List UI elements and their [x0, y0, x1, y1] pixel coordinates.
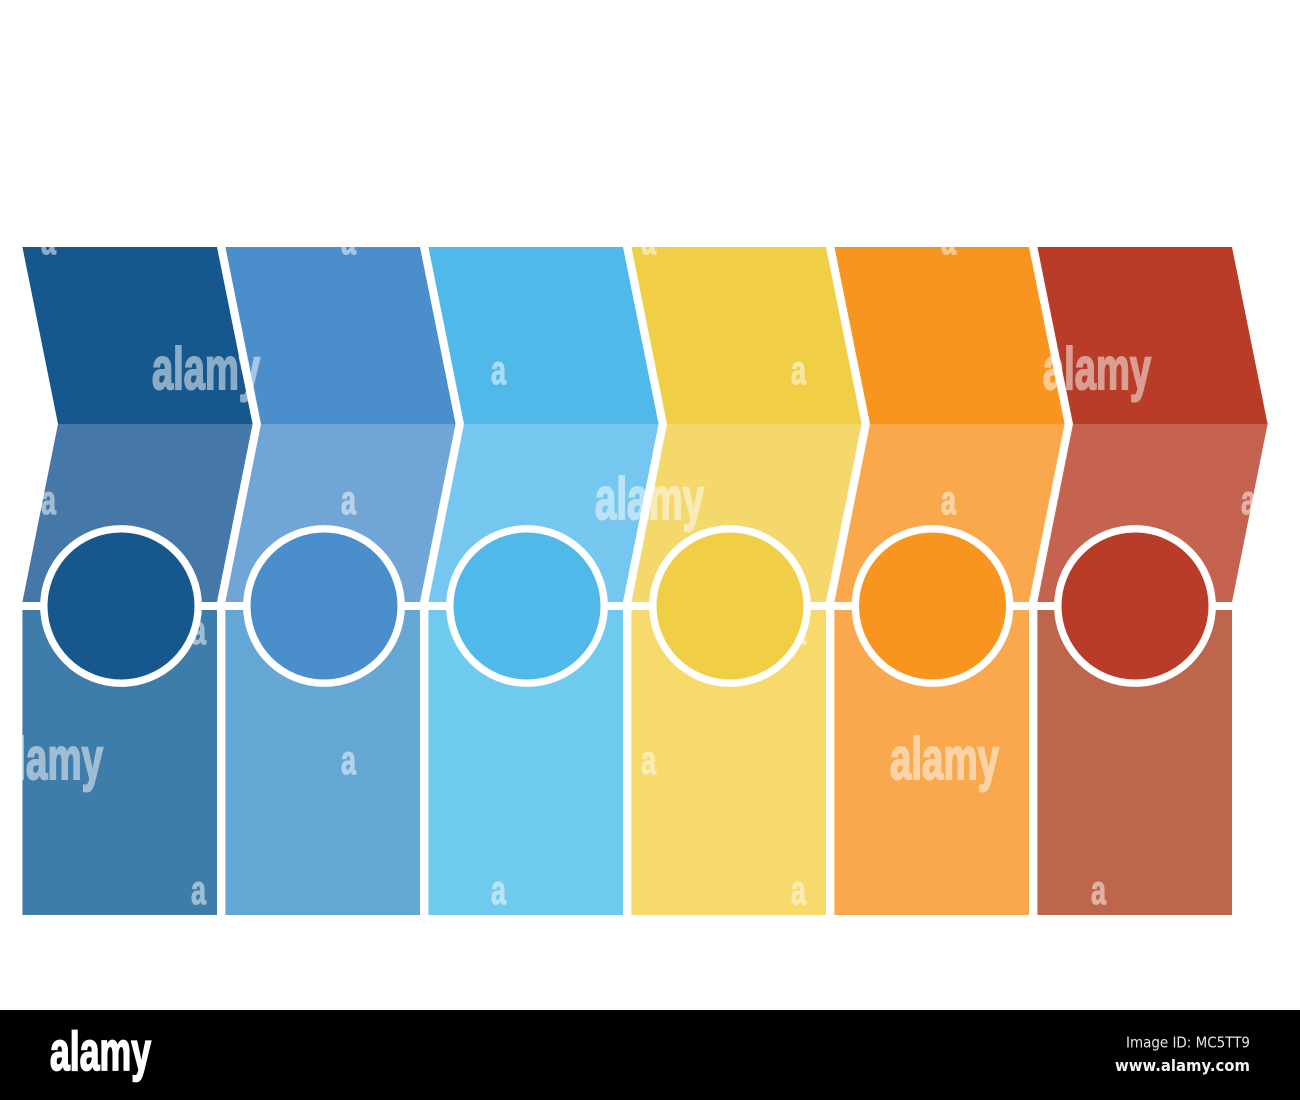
watermark text: a [491, 347, 507, 393]
watermark text: a [941, 477, 957, 523]
watermark text: a [341, 477, 357, 523]
watermark text [0, 217, 1257, 913]
white timeline band [22, 602, 1232, 610]
watermark text: a [191, 607, 207, 653]
circle marker 2 [247, 529, 401, 683]
watermark text: a [641, 737, 657, 783]
watermark text: a [191, 867, 207, 913]
watermark text: alamy [595, 466, 704, 532]
image id: Image ID: MC5TT9 [1126, 1034, 1250, 1052]
watermark text: a [791, 607, 807, 653]
step 5 column [834, 247, 1065, 915]
step 2 column [225, 247, 456, 915]
step 1 column [22, 247, 253, 915]
watermark text: alamy [1043, 336, 1151, 402]
watermark text: a [341, 217, 357, 263]
step 4 column [631, 247, 862, 915]
watermark text: a [1091, 867, 1107, 913]
circle marker 5 [855, 529, 1010, 683]
watermark text: a [791, 347, 807, 393]
circle marker 3 [450, 529, 604, 683]
circle marker 6 [1058, 529, 1212, 683]
watermark text: alamy [890, 726, 999, 792]
watermark text: a [941, 217, 957, 263]
footer bar [0, 1010, 1300, 1100]
white left margin mask for clipped watermark [0, 610, 22, 915]
watermark text: a [41, 217, 57, 263]
watermark text: a [1241, 477, 1257, 523]
circle marker 1 [44, 529, 198, 683]
watermark text: a [491, 607, 507, 653]
watermark text: a [641, 217, 657, 263]
circle marker 4 [653, 529, 807, 683]
watermark text: a [341, 737, 357, 783]
watermark text: a [1091, 607, 1107, 653]
step 6 column [1037, 247, 1268, 915]
step 3 column [428, 247, 659, 915]
watermark text: alamy [152, 336, 260, 402]
watermark text: a [491, 867, 507, 913]
watermark text: a [41, 477, 57, 523]
watermark text: a [791, 867, 807, 913]
website address: www.alamy.com [1115, 1056, 1250, 1075]
footer logo: alamy [50, 1020, 151, 1082]
